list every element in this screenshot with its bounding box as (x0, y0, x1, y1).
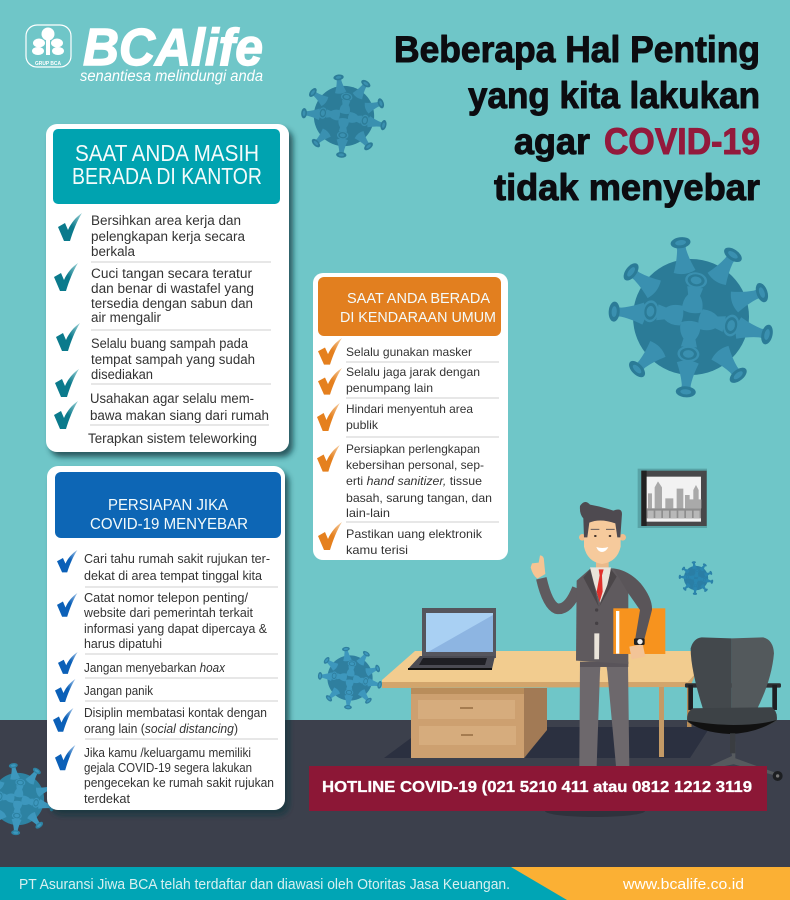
list: persiapan: website dari pemerintah terkait (83, 606, 254, 620)
shirt and tie (583, 567, 617, 659)
picture frame (638, 469, 707, 528)
desk top (382, 651, 696, 682)
list: di kantor: berkala (91, 244, 135, 259)
list: persiapan: pengecekan ke rumah sakit rujukan (84, 776, 274, 790)
hotline banner (309, 766, 767, 811)
other arm with watch (613, 568, 652, 659)
list: di kantor: bawa makan siang dari rumah (90, 408, 269, 423)
list: persiapan: Jika kamu /keluargamu memiliki (84, 746, 251, 760)
list: di kantor: pelengkapan kerja secara (91, 229, 245, 244)
list: di kantor: Usahakan agar selalu mem- (90, 391, 254, 406)
footer disclaimer: PT Asuransi Jiwa BCA telah terdaftar dan diawasi oleh Otoritas Jasa Keuangan. (19, 876, 510, 893)
eyes and mouth (591, 529, 615, 552)
list: kendaraan umum: Persiapkan perlengkapan (346, 442, 480, 456)
emblem: GRUP BCA (35, 61, 61, 67)
header: persiapan (55, 472, 281, 538)
list: di kantor: Selalu buang sampah pada (91, 336, 248, 351)
title (394, 29, 760, 208)
header: kendaraan umum: SAAT ANDA BERADA (347, 291, 490, 307)
header: persiapan: PERSIAPAN JIKA (108, 497, 228, 514)
list: kendaraan umum: Selalu jaga jarak dengan (346, 365, 480, 379)
panel: persiapan (47, 466, 285, 810)
list: di kantor: tersedia dengan sabun dan (91, 296, 253, 311)
face (584, 513, 621, 564)
desk (382, 651, 710, 758)
icon: virus upper (301, 74, 388, 158)
header: di kantor (53, 129, 280, 204)
list: persiapan: Catat nomor telepon penting/ (84, 591, 249, 605)
list: di kantor: tempat sampah yang sudah (91, 352, 255, 367)
list: persiapan: harus dipatuhi (84, 637, 162, 651)
list: kendaraan umum: Pastikan uang elektronik (346, 527, 483, 541)
title: tidak menyebar (494, 167, 760, 208)
title: yang kita lakukan (468, 75, 760, 116)
list: kendaraan umum: basah, sarung tangan, dan (346, 491, 492, 505)
floor (0, 720, 790, 868)
panel: kendaraan umum (313, 273, 508, 560)
legs (579, 662, 629, 766)
icon: virus bottom left (0, 762, 56, 835)
hotline banner: HOTLINE COVID-19 (021 5210 411 atau 0812 1212 3119 (322, 779, 752, 796)
check marks: kendaraan umum (317, 338, 342, 550)
footer website: www.bcalife.co.id (622, 876, 744, 893)
list: kendaraan umum: Hindari menyentuh area (346, 402, 473, 416)
header: di kantor: SAAT ANDA MASIH (75, 140, 259, 166)
title: agar (514, 121, 590, 162)
icon: virus small right (679, 561, 714, 595)
check marks: persiapan (53, 550, 78, 770)
list: persiapan (83, 552, 278, 806)
tagline: senantiesa melindungi anda (80, 68, 263, 85)
icon: virus large (608, 236, 775, 398)
list: di kantor: air mengalir (91, 310, 161, 325)
list: persiapan: gejala COVID-19 segera lakukan (84, 761, 252, 775)
footer bar (0, 867, 790, 900)
list: persiapan: Disiplin membatasi kontak dengan (84, 706, 267, 720)
list: kendaraan umum: erti hand sanitizer, tissue (346, 474, 482, 488)
man with folder (531, 502, 665, 766)
list: kendaraan umum: kebersihan personal, sep- (346, 458, 484, 472)
header: di kantor: BERADA DI KANTOR (72, 163, 262, 189)
header: persiapan: COVID-19 MENYEBAR (90, 516, 248, 533)
list: di kantor: Bersihkan area kerja dan (91, 213, 241, 228)
list: persiapan: dekat di area tempat tinggal kita (84, 569, 262, 583)
laptop (408, 608, 496, 670)
list: kendaraan umum: lain-lain (346, 506, 390, 520)
check marks: di kantor (54, 213, 82, 429)
list: kendaraan umum (346, 345, 499, 557)
logo: BCA life (26, 19, 263, 85)
icon: virus near desk (318, 646, 383, 710)
drawer cabinet (411, 688, 547, 758)
hair (580, 502, 622, 537)
folder (613, 608, 665, 654)
list: persiapan: Jangan menyebarkan hoax (84, 661, 226, 675)
header: kendaraan umum: DI KENDARAAN UMUM (340, 310, 496, 326)
suit jacket (576, 568, 628, 664)
list: di kantor: disediakan (91, 367, 153, 382)
list: di kantor: Cuci tangan secara teratur (91, 266, 253, 281)
list: persiapan: Cari tahu rumah sakit rujukan ter- (84, 552, 270, 566)
list: persiapan: orang lain (social distancing) (84, 722, 238, 736)
list: di kantor: Terapkan sistem teleworking (88, 431, 257, 446)
list: persiapan: terdekat (84, 792, 131, 806)
chair (685, 637, 783, 781)
panel: di kantor (46, 124, 289, 452)
list: persiapan: informasi yang dapat dipercaya & (84, 622, 268, 636)
emblem (26, 25, 71, 67)
list: di kantor (88, 213, 271, 446)
hand thumbs up (531, 555, 545, 579)
list: persiapan: Jangan panik (84, 684, 154, 698)
title: COVID-19 (604, 121, 760, 162)
list: kendaraan umum: kamu terisi (346, 543, 408, 557)
list: kendaraan umum: Selalu gunakan masker (346, 345, 472, 359)
title: Beberapa Hal Penting (394, 29, 760, 70)
neck and ears (596, 558, 609, 570)
list: kendaraan umum: publik (346, 418, 379, 432)
list: di kantor: dan benar di wastafel yang (91, 281, 254, 296)
header: kendaraan umum (318, 277, 501, 336)
list: kendaraan umum: penumpang lain (346, 381, 433, 395)
wordmark: BCAlife (83, 19, 263, 77)
raised arm (541, 578, 577, 609)
shadow below hotline (545, 805, 645, 817)
